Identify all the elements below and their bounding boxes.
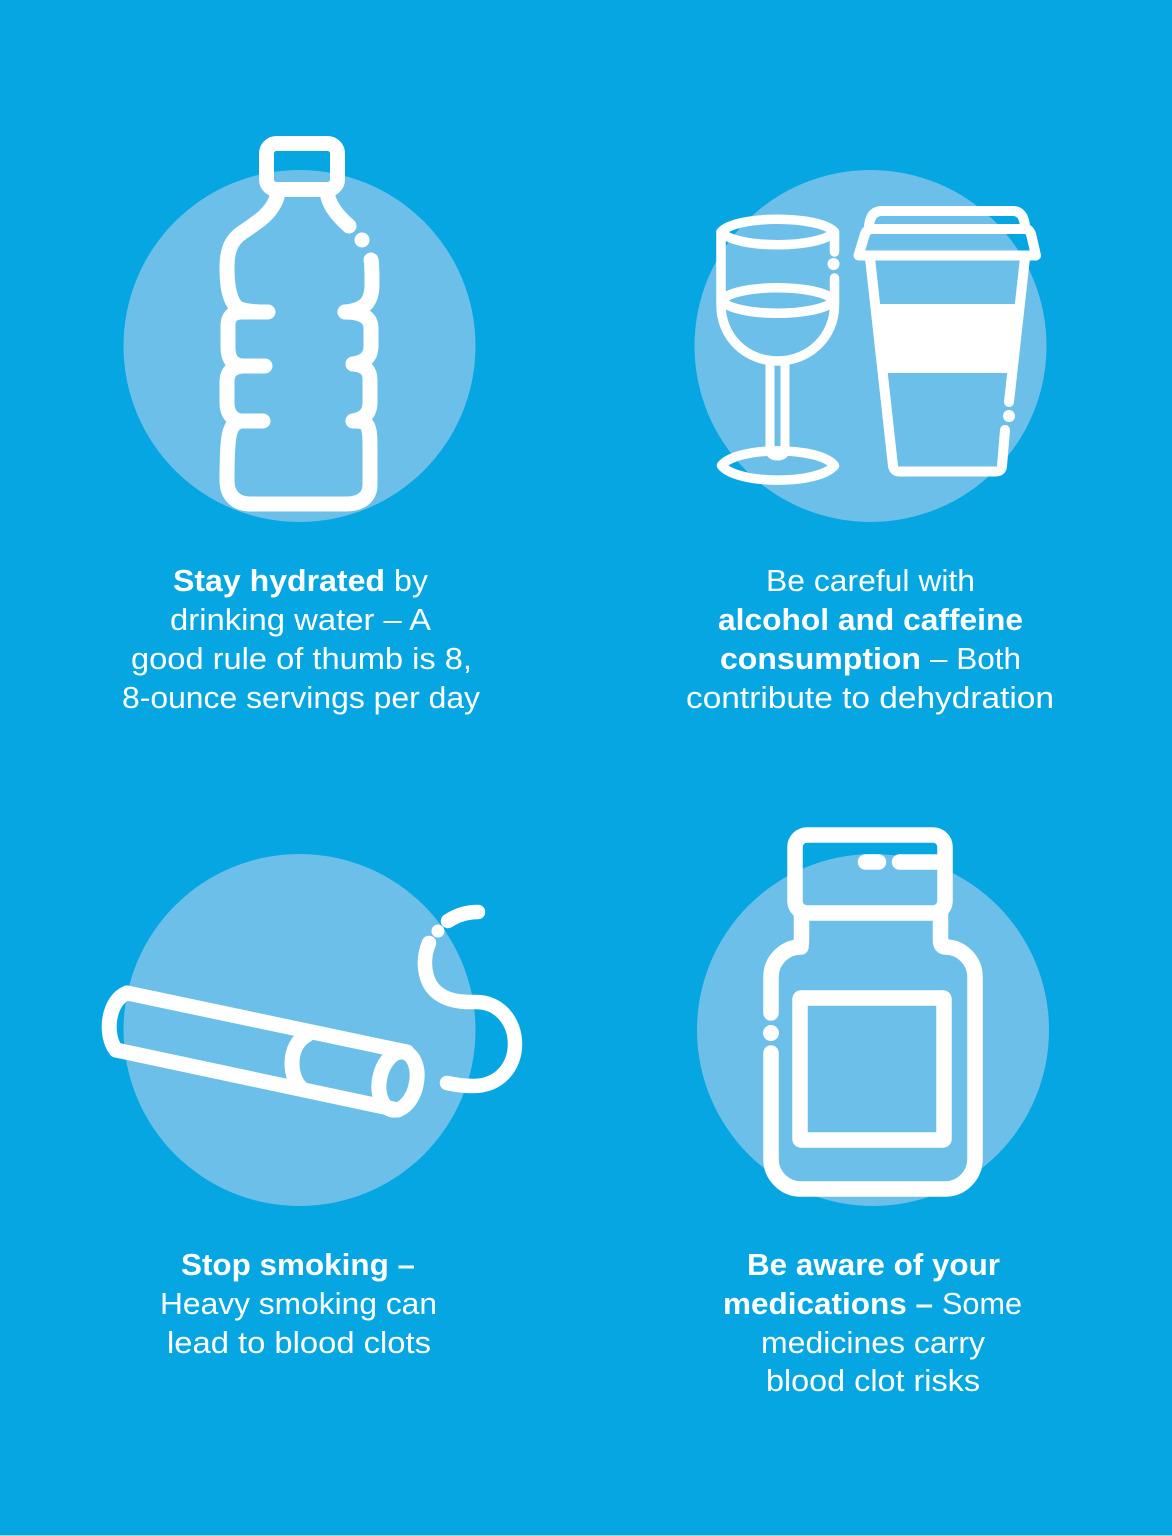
text: alcohol and caffeine: alcohol and caffeine (718, 602, 1023, 637)
text: alcohol and caffeine: Be careful with (766, 563, 975, 598)
text: medications: Some (942, 1286, 1022, 1321)
text: stay hydrated: good rule of thumb is 8, (131, 641, 472, 676)
icon: cigarette (109, 993, 422, 1114)
text: stop smoking: Heavy smoking can (160, 1286, 437, 1321)
panel: alcohol and caffeine (686, 170, 1054, 715)
text: medications: Be aware of your (747, 1247, 1000, 1282)
text: medications: medicines carry (761, 1325, 986, 1360)
icon: smoke (425, 912, 515, 1086)
panel: medications (697, 835, 1049, 1398)
icon: bottle dot (354, 232, 370, 248)
text: stay hydrated: 8-ounce servings per day (122, 680, 481, 715)
text: alcohol and caffeine: consumption (720, 641, 921, 676)
text: medications: medications – (723, 1286, 933, 1321)
text: stop smoking: lead to blood clots (167, 1325, 431, 1360)
circle background: smoking (124, 854, 476, 1206)
text: alcohol and caffeine: – Both (930, 641, 1021, 676)
text: alcohol and caffeine (686, 563, 1054, 715)
text: stay hydrated: Stay hydrated (173, 563, 385, 598)
text: stop smoking: Stop smoking – (181, 1247, 415, 1282)
panel: stay hydrated (122, 144, 481, 715)
text: medications (723, 1247, 1022, 1398)
text: medications: blood clot risks (766, 1363, 980, 1398)
icon: wine glass (721, 219, 840, 480)
circle background: hydration (124, 170, 476, 522)
text: stop smoking (160, 1247, 437, 1360)
text: stay hydrated (122, 563, 481, 715)
text: stay hydrated: by (394, 563, 429, 598)
icon: coffee cup (858, 211, 1036, 472)
text: alcohol and caffeine: contribute to dehydration (686, 680, 1054, 715)
circle background: medications (697, 854, 1049, 1206)
panel: stop smoking (109, 854, 515, 1360)
icon: water bottle (227, 144, 372, 504)
icon: medicine bottle (763, 835, 975, 1189)
text: stay hydrated: drinking water – A (170, 602, 431, 637)
circle background: alcohol and caffeine (694, 170, 1046, 522)
